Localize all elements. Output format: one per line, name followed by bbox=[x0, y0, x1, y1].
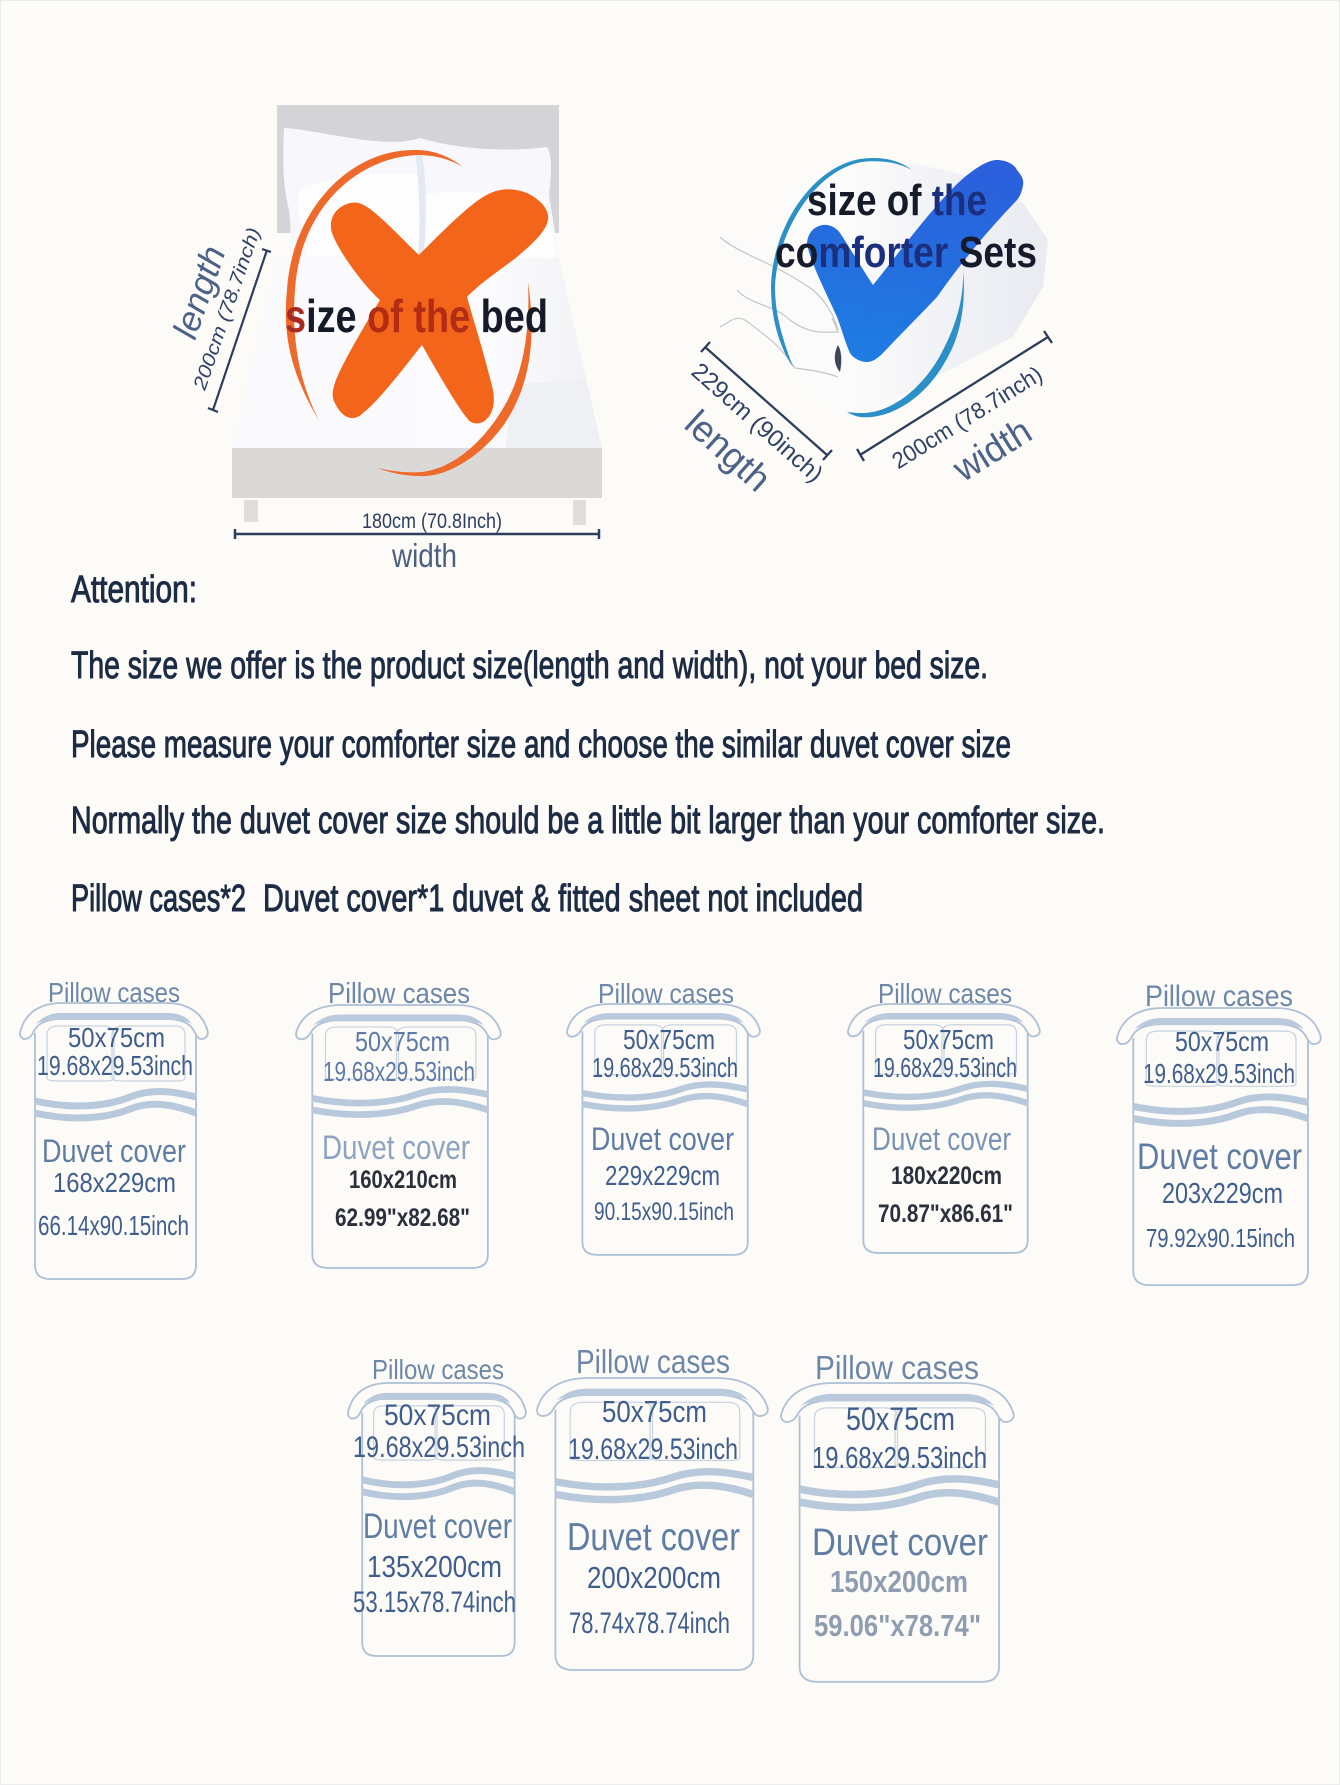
text block: attention notes: Please measure your comforter size and choose the similar duvet cover size bbox=[71, 724, 1011, 766]
dimension: comforter width bbox=[857, 331, 1052, 490]
panel: size card 229x229cm: 50x75cm bbox=[623, 1024, 715, 1055]
panel: size card 135x200cm: Pillow cases bbox=[372, 1354, 504, 1385]
panel: size card 180x220cm: 180x220cm bbox=[891, 1162, 1002, 1190]
panel: size card 200x200cm: 19.68x29.53inch bbox=[568, 1433, 738, 1466]
dimension: comforter width: 200cm (78.7inch) bbox=[887, 361, 1047, 474]
panel: size card 150x200cm: 59.06"x78.74" bbox=[814, 1608, 981, 1643]
panel: size card 203x229cm: Duvet cover bbox=[1137, 1136, 1302, 1177]
panel: size card 203x229cm: 50x75cm bbox=[1175, 1026, 1269, 1057]
panel: size card 203x229cm: Pillow cases bbox=[1145, 980, 1293, 1013]
panel: size card 168x229cm: 66.14x90.15inch bbox=[38, 1210, 189, 1241]
panel: size card 135x200cm: 19.68x29.53inch bbox=[353, 1431, 525, 1464]
panel: size card 200x200cm bbox=[537, 1343, 768, 1670]
panel: size card 168x229cm: 19.68x29.53inch bbox=[37, 1050, 193, 1081]
text block: attention notes: The size we offer is the product size(length and width), not your bed size. bbox=[71, 645, 988, 687]
text block: attention notes bbox=[71, 569, 1105, 920]
label: size of the comforter Sets: size of the bbox=[807, 176, 987, 225]
panel: size card 135x200cm: 53.15x78.74inch bbox=[353, 1586, 516, 1619]
panel: size card 168x229cm: Duvet cover bbox=[42, 1133, 186, 1169]
icon: blue circle sweep bbox=[771, 158, 964, 417]
dimension: bed length bbox=[166, 225, 271, 412]
panel: size card 180x220cm: 50x75cm bbox=[903, 1024, 994, 1055]
icon: folded comforter bbox=[720, 163, 1048, 420]
icon: bed illustration bbox=[232, 105, 602, 525]
label: size of the comforter Sets: comforter Sets bbox=[775, 228, 1037, 277]
panel: size card 229x229cm: Duvet cover bbox=[591, 1121, 734, 1157]
panel: size card 150x200cm: 50x75cm bbox=[846, 1401, 955, 1437]
panel: size card 200x200cm: 200x200cm bbox=[587, 1560, 721, 1595]
panel: size card 200x200cm: Pillow cases bbox=[576, 1343, 730, 1380]
panel: size card 135x200cm: 50x75cm bbox=[384, 1399, 491, 1432]
panel: size card 229x229cm bbox=[567, 978, 760, 1255]
label: size of the bed: size of the bed bbox=[285, 290, 548, 342]
dimension: bed width bbox=[235, 510, 599, 574]
panel: size card 203x229cm: 79.92x90.15inch bbox=[1146, 1223, 1295, 1253]
panel: size card 150x200cm: 150x200cm bbox=[830, 1564, 968, 1599]
panel: size card 180x220cm bbox=[848, 978, 1040, 1253]
text block: attention notes: Pillow cases*2 bbox=[71, 878, 246, 920]
text block: attention notes: Duvet cover*1 duvet & fitted sheet not included bbox=[263, 878, 863, 920]
panel: size card 229x229cm: Pillow cases bbox=[598, 978, 734, 1009]
panel: size card 168x229cm: 168x229cm bbox=[53, 1167, 176, 1198]
panel: size card 180x220cm: Duvet cover bbox=[872, 1121, 1011, 1157]
panel: size card 135x200cm: Duvet cover bbox=[363, 1507, 512, 1546]
panel: size card 150x200cm bbox=[781, 1349, 1014, 1682]
panel: size card 160x210cm bbox=[296, 978, 501, 1268]
dimension: bed width: width bbox=[391, 537, 457, 574]
icon: orange circle sweep bbox=[286, 150, 532, 476]
icon: orange cross bbox=[331, 189, 548, 423]
dimension: comforter width: width bbox=[945, 410, 1039, 490]
panel: size card 229x229cm: 90.15x90.15inch bbox=[594, 1198, 734, 1226]
panel: bed size diagram bbox=[166, 105, 602, 574]
panel: comforter size diagram bbox=[677, 158, 1052, 500]
panel: size card 180x220cm: 19.68x29.53inch bbox=[873, 1052, 1017, 1083]
panel: size card 168x229cm: Pillow cases bbox=[48, 977, 180, 1008]
panel: size card 160x210cm: Duvet cover bbox=[322, 1129, 470, 1167]
text block: attention notes: Attention: bbox=[71, 569, 197, 611]
panel: size card 200x200cm: Duvet cover bbox=[567, 1516, 740, 1559]
panel: size card 135x200cm: 135x200cm bbox=[367, 1549, 502, 1584]
panel: size card 160x210cm: 50x75cm bbox=[355, 1026, 450, 1057]
panel: size card 160x210cm: 62.99"x82.68" bbox=[335, 1204, 470, 1232]
dimension: bed length: 200cm (78.7inch) bbox=[189, 225, 265, 394]
dimension: bed length: length bbox=[166, 241, 233, 344]
dimension: bed width: 180cm (70.8Inch) bbox=[362, 510, 502, 533]
icon: blue check mark bbox=[807, 160, 1023, 362]
panel: size card 150x200cm: 19.68x29.53inch bbox=[812, 1440, 987, 1475]
panel: size card 160x210cm: 160x210cm bbox=[349, 1166, 457, 1194]
dimension: comforter length: length bbox=[677, 402, 779, 500]
panel: size card 229x229cm: 19.68x29.53inch bbox=[592, 1052, 738, 1083]
panel: size card 168x229cm bbox=[20, 977, 208, 1279]
panel: size card 229x229cm: 229x229cm bbox=[605, 1160, 720, 1191]
panel: size card 160x210cm: 19.68x29.53inch bbox=[323, 1056, 475, 1087]
panel: size card 160x210cm: Pillow cases bbox=[328, 978, 470, 1010]
panel: size card 180x220cm: Pillow cases bbox=[878, 978, 1012, 1009]
panel: size card 150x200cm: Duvet cover bbox=[812, 1522, 988, 1564]
dimension: comforter length: 229cm (90inch) bbox=[686, 358, 828, 488]
panel: size card 150x200cm: Pillow cases bbox=[815, 1349, 979, 1386]
panel: size card 180x220cm: 70.87"x86.61" bbox=[878, 1200, 1013, 1228]
panel: size card 135x200cm bbox=[348, 1354, 526, 1656]
panel: size card 200x200cm: 78.74x78.74inch bbox=[569, 1607, 730, 1640]
label: size of the comforter Sets bbox=[775, 176, 1037, 277]
panel: size card 168x229cm: 50x75cm bbox=[68, 1022, 165, 1053]
panel: size card 200x200cm: 50x75cm bbox=[602, 1394, 707, 1429]
panel: size card 203x229cm: 203x229cm bbox=[1162, 1178, 1283, 1210]
panel: size card 203x229cm bbox=[1117, 980, 1321, 1285]
